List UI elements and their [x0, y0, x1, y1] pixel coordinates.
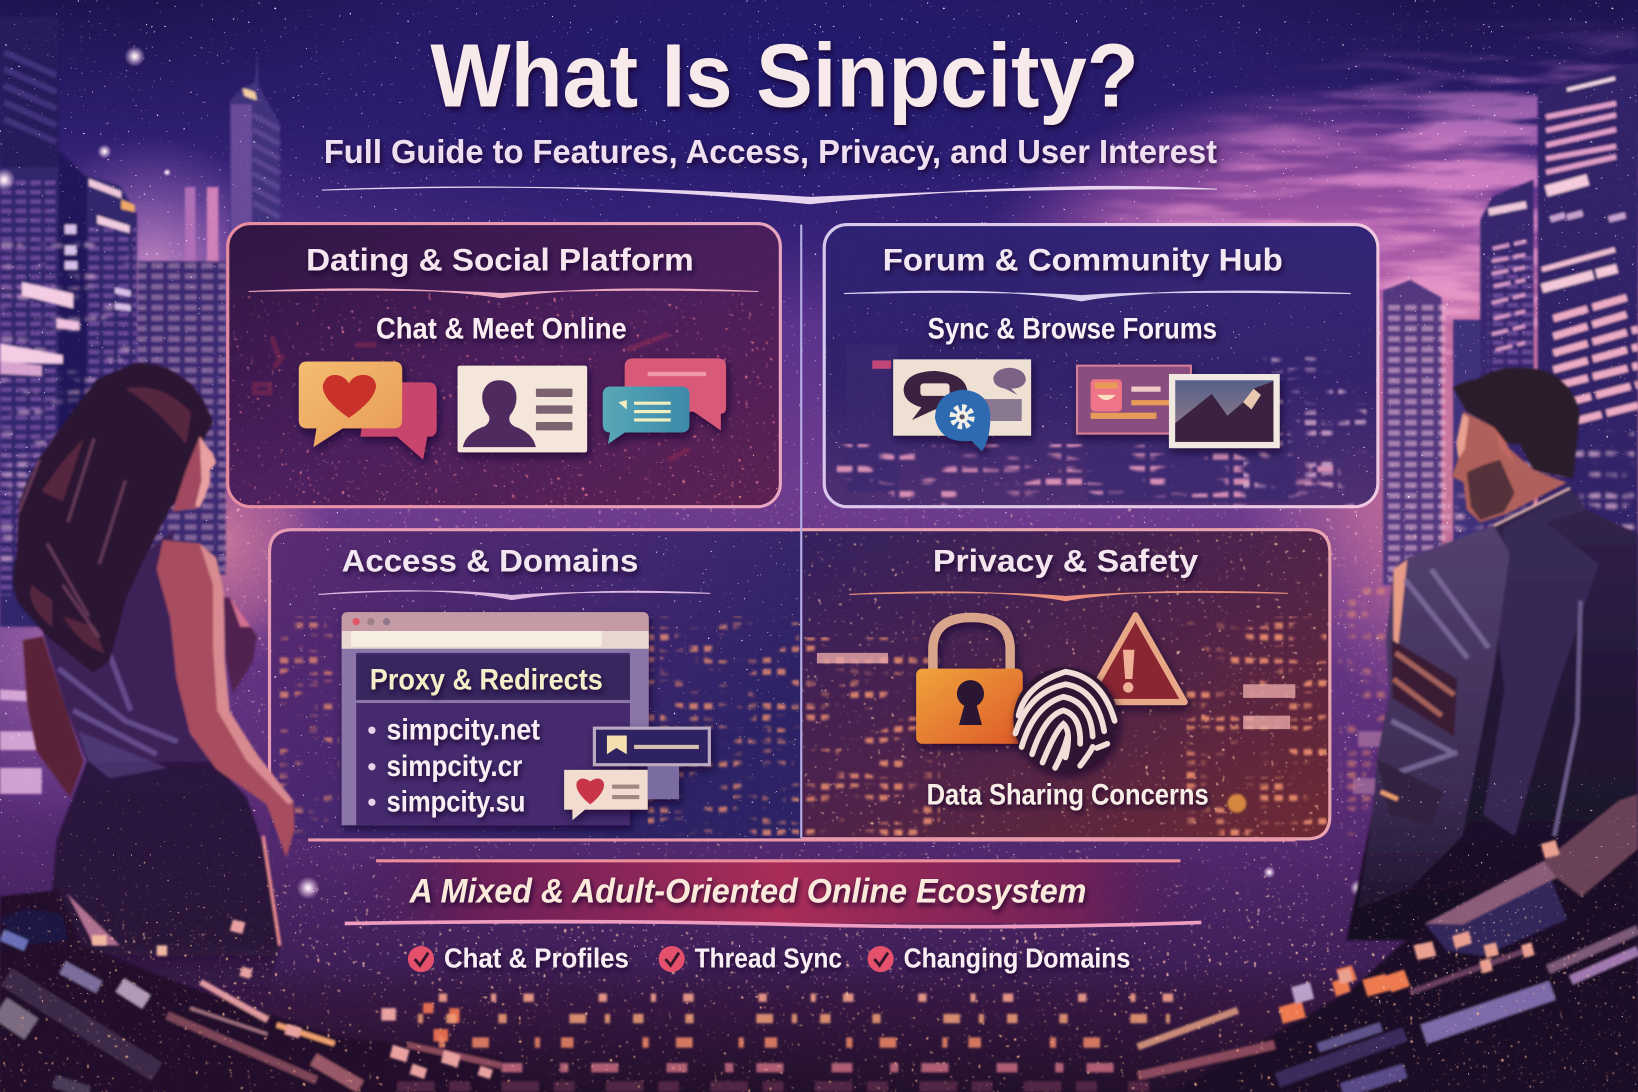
- panel: Dating & Social Platform: [228, 224, 780, 507]
- left arm: [23, 636, 84, 797]
- right roof: [1138, 794, 1638, 1092]
- front tower: [0, 167, 137, 627]
- icon: overlapping message bubbles: [603, 358, 726, 444]
- subheading: Chat & Meet Online: [376, 313, 627, 345]
- domain list: simpcity.cr: [387, 751, 522, 783]
- title: What Is Sinpcity?: [430, 27, 1139, 127]
- panel: Forum & Community Hub: [824, 225, 1378, 507]
- jacket: [1347, 488, 1638, 940]
- skirt and dress: [43, 530, 213, 762]
- hair: [13, 363, 213, 673]
- spire tower: [230, 50, 280, 251]
- panel base rule: [308, 838, 1295, 841]
- feature: Chat & Profiles: Chat & Profiles: [444, 941, 629, 973]
- icon: warning triangle: [1086, 615, 1185, 702]
- domain list: [368, 715, 540, 819]
- banner: ecosystem summary: [345, 861, 1212, 927]
- domain list: simpcity.su: [387, 787, 525, 819]
- figure: woman seen from behind: [13, 363, 295, 1003]
- heading: Forum & Community Hub: [883, 243, 1283, 278]
- icon: bookmark card and heart message: [564, 728, 709, 820]
- heading: Dating & Social Platform: [306, 243, 694, 278]
- face profile: [172, 437, 216, 512]
- icon: profile card: [458, 366, 587, 452]
- panel: Access & Domains: [270, 530, 801, 839]
- big tower: [1538, 63, 1638, 679]
- subheading: Sync & Browse Forums: [928, 313, 1217, 345]
- center divider: [800, 225, 802, 838]
- browser window: [342, 612, 649, 825]
- far pink towers: [185, 187, 195, 271]
- bust: [224, 598, 257, 694]
- icon: forum chat card with gear: [893, 359, 1031, 451]
- icon: padlock: [916, 617, 1023, 744]
- background: left skyline: [0, 17, 280, 794]
- heading: Privacy & Safety: [933, 543, 1199, 578]
- mid tower: [1480, 180, 1534, 585]
- foreground: rooftops and city lights: [0, 752, 1638, 1092]
- center lights: [397, 998, 1180, 1086]
- icon: fingerprint: [1013, 668, 1118, 772]
- icon: heart chat bubbles: [299, 361, 437, 460]
- back and right arm skin: [157, 540, 295, 858]
- banner: ecosystem summary: A Mixed & Adult-Oriented Online Ecosystem: [409, 873, 1086, 911]
- browser heading: Proxy & Redirects: [370, 664, 603, 696]
- small tower: [1383, 280, 1442, 585]
- hair: [1453, 367, 1580, 478]
- feature: Thread Sync: Thread Sync: [695, 941, 842, 973]
- neck and face: [1452, 412, 1567, 522]
- icon: thread card and photo: [1077, 366, 1280, 448]
- heading: Access & Domains: [342, 543, 638, 578]
- glitter over lower scene: [0, 851, 1638, 1092]
- background: pink clouds: [1087, 23, 1638, 356]
- title divider: [322, 186, 1217, 204]
- subtitle: Full Guide to Features, Access, Privacy, and User Interest: [324, 134, 1217, 171]
- dark tall tower: [0, 17, 58, 585]
- panel: Privacy & Safety: [801, 530, 1330, 839]
- low block: [138, 261, 226, 575]
- background: right skyline: [1339, 63, 1638, 836]
- figure: man seen from behind: [1347, 367, 1638, 940]
- feature: Changing Domains: Changing Domains: [904, 941, 1130, 973]
- caption: Data Sharing Concerns: [927, 779, 1209, 811]
- domain list: simpcity.net: [387, 715, 540, 747]
- lit squares: [92, 840, 1560, 1079]
- left roof: [0, 890, 501, 1092]
